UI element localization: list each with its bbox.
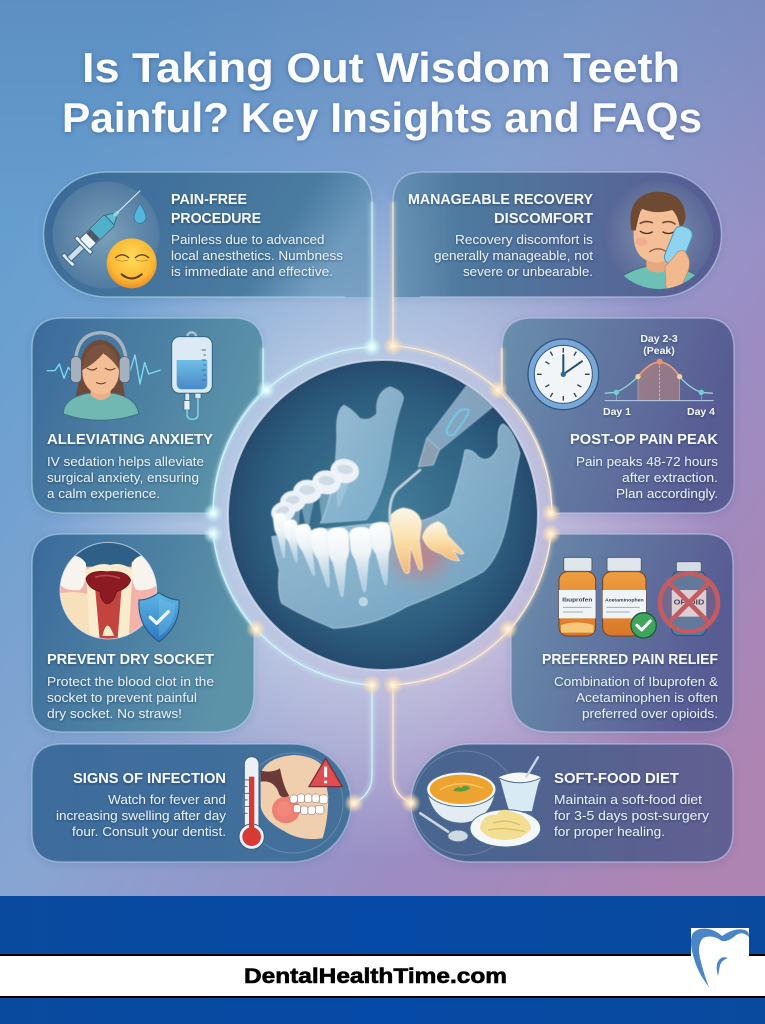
panel: alleviating anxiety — [32, 318, 263, 513]
body text: surgical anxiety, ensuring — [47, 470, 199, 485]
body text: IV sedation helps alleviate — [47, 454, 204, 469]
body text — [56, 792, 227, 839]
chart labels: Day 1 — [603, 406, 631, 418]
title: Is Taking Out Wisdom Teeth — [82, 44, 680, 91]
chart: pain curve — [605, 359, 714, 401]
heading — [408, 191, 593, 227]
near jaw — [272, 424, 520, 628]
icon: ibuprofen bottle: Ibuprofen — [562, 598, 592, 604]
icon: crossed-out opioid bottle: OPIOID — [674, 598, 704, 607]
dental instrument — [390, 383, 495, 521]
icon: acetaminophen bottle with check — [603, 557, 656, 638]
red inflammation glow — [393, 530, 447, 577]
icon: shield with check — [139, 593, 179, 642]
body text: Acetaminophen is often — [576, 690, 718, 705]
front teeth row — [273, 512, 396, 597]
body text: socket to prevent painful — [47, 690, 197, 705]
heading: PROCEDURE — [171, 210, 261, 227]
body text: for proper healing. — [554, 824, 665, 839]
heading — [171, 191, 261, 227]
panel: post-op pain peak — [502, 318, 734, 513]
icon: thermometer — [239, 757, 264, 849]
body text: Plan accordingly. — [616, 486, 718, 501]
central illustration: jaw with wisdom tooth extraction — [228, 360, 538, 670]
body text: Watch for fever and — [108, 792, 226, 807]
body text — [171, 232, 344, 279]
heading: PAIN-FREE — [171, 191, 247, 208]
heading: SOFT-FOOD DIET — [554, 770, 679, 787]
panel: pain-free procedure — [44, 172, 372, 297]
website name: DentalHealthTime.com — [244, 965, 507, 988]
body text: Combination of Ibuprofen & — [554, 674, 718, 689]
heading: DISCOMFORT — [494, 210, 593, 227]
logo: tooth — [691, 928, 749, 987]
title: Painful? Key Insights and FAQs — [62, 94, 702, 141]
body text: generally manageable, not — [434, 248, 593, 263]
title — [62, 44, 702, 141]
body text: Recovery discomfort is — [455, 232, 594, 247]
body text: increasing swelling after day — [56, 808, 227, 823]
panel: prevent dry socket — [32, 534, 254, 732]
heading: PREVENT DRY SOCKET — [47, 651, 214, 668]
heading: PREFERRED PAIN RELIEF — [542, 651, 718, 668]
panel: manageable recovery discomfort — [393, 172, 722, 300]
body text: local anesthetics. Numbness — [171, 248, 344, 263]
extracted molar — [389, 508, 423, 573]
body text — [554, 674, 718, 721]
body text: a calm experience. — [47, 486, 160, 501]
chart labels — [603, 333, 715, 418]
body text — [434, 232, 594, 279]
body text: Pain peaks 48-72 hours — [576, 454, 719, 469]
icon: acetaminophen bottle with check: Acetaminophen — [605, 598, 644, 603]
body text: after extraction. — [622, 470, 718, 485]
icon: clock — [528, 339, 599, 410]
body text: Painless due to advanced — [171, 232, 324, 247]
body text: four. Consult your dentist. — [72, 824, 226, 839]
body text: Protect the blood clot in the — [47, 674, 214, 689]
wisdom tooth — [423, 522, 464, 561]
icon: relieved face emoji — [107, 238, 157, 288]
chart labels: Day 4 — [687, 406, 715, 418]
icon: swollen jaw and warning — [261, 755, 342, 839]
footer band — [0, 896, 765, 1024]
panel: preferred pain relief — [511, 534, 733, 732]
far jaw branch — [320, 387, 403, 523]
icon: tooth socket cross-section — [57, 540, 179, 643]
panel: signs of infection — [32, 744, 351, 862]
glowing connector nodes — [203, 336, 561, 813]
body text: Maintain a soft-food diet — [554, 792, 702, 807]
chart labels: Day 2-3 — [640, 333, 678, 345]
icon: ibuprofen bottle — [559, 557, 596, 636]
heading: MANAGEABLE RECOVERY — [408, 191, 593, 208]
heading: POST-OP PAIN PEAK — [570, 431, 718, 448]
heading: ALLEVIATING ANXIETY — [47, 431, 213, 448]
icon: syringe and drop — [59, 182, 148, 270]
body text — [554, 792, 710, 839]
chart labels: (Peak) — [643, 345, 675, 357]
heading: SIGNS OF INFECTION — [73, 770, 226, 787]
back teeth row — [270, 458, 360, 526]
icon: crossed-out opioid bottle — [660, 562, 718, 636]
body text: for 3-5 days post-surgery — [554, 808, 710, 823]
body text: preferred over opioids. — [582, 706, 718, 721]
body text: severe or unbearable. — [463, 264, 593, 279]
panel: soft-food diet — [411, 744, 733, 862]
body text: is immediate and effective. — [171, 264, 333, 279]
connector lines — [213, 202, 552, 803]
body text — [576, 454, 719, 501]
icon: woman with headphones — [47, 333, 161, 420]
body text — [47, 674, 214, 721]
icon: man with ice pack — [623, 192, 696, 289]
icon: IV bag — [172, 332, 212, 419]
icon: soft foods — [420, 757, 542, 847]
body text: dry socket. No straws! — [47, 706, 182, 721]
body text — [47, 454, 204, 501]
